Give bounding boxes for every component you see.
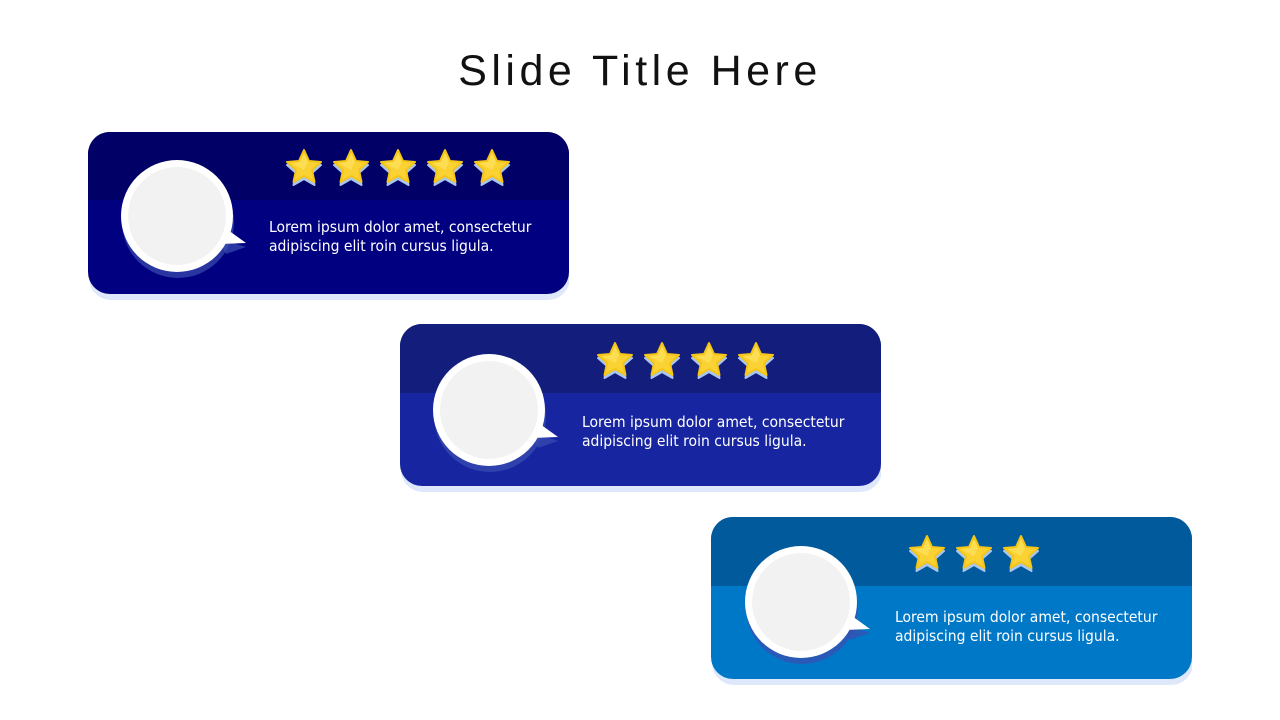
text 1: Lorem ipsum dolor amet, consectetur [269, 218, 531, 236]
text 1: adipiscing elit roin cursus ligula. [269, 237, 494, 255]
text 2 [582, 413, 844, 450]
text 1 [269, 218, 532, 255]
text 2: adipiscing elit roin cursus ligula. [582, 432, 807, 450]
panel: review card 3 [711, 517, 1192, 685]
panel: review card 2 [400, 324, 881, 492]
text 2: Lorem ipsum dolor amet, consectetur [582, 413, 844, 431]
title: Slide Title Here [458, 47, 822, 95]
panel: review card 1 [88, 132, 569, 300]
text 3 [895, 608, 1158, 645]
text 3: Lorem ipsum dolor amet, consectetur [895, 608, 1157, 626]
text 3: adipiscing elit roin cursus ligula. [895, 627, 1120, 645]
